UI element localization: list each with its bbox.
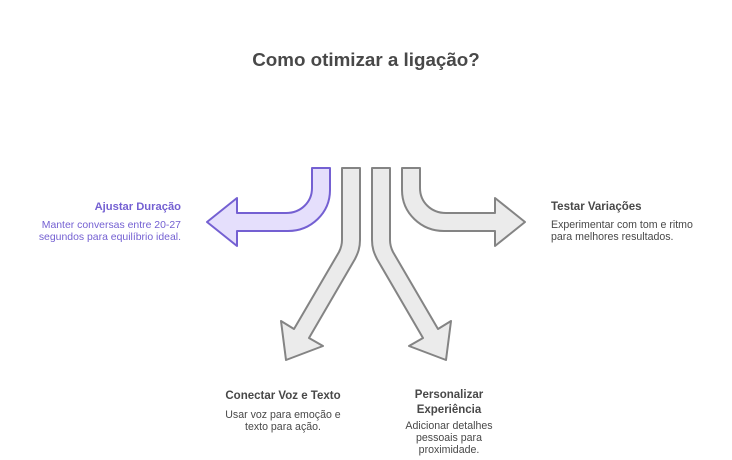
description: Personalizar Experiência: Adicionar detalhes: [405, 420, 493, 432]
heading: Conectar Voz e Texto: Conectar Voz e Texto: [225, 390, 341, 402]
text block: Testar Variações: [551, 201, 693, 243]
description: Ajustar Duração: Manter conversas entre 20-27: [42, 220, 181, 231]
arrow: Ajustar Duração: [207, 168, 330, 246]
description: Conectar Voz e Texto: [225, 409, 341, 432]
arrow: Testar Variações: [402, 168, 525, 246]
description: Conectar Voz e Texto: texto para ação.: [245, 420, 321, 432]
description: Testar Variações: [551, 219, 693, 243]
heading: Personalizar Experiência: Personalizar: [415, 389, 483, 401]
description: Conectar Voz e Texto: Usar voz para emoção e: [225, 409, 341, 421]
heading: Personalizar Experiência: Experiência: [417, 404, 481, 416]
text block: Personalizar Experiência: [405, 389, 493, 456]
description: Ajustar Duração: segundos para equilíbrio ideal.: [39, 232, 181, 243]
description: Personalizar Experiência: pessoais para: [416, 432, 482, 444]
description: Testar Variações: Experimentar com tom e ritmo: [551, 219, 693, 231]
description: Personalizar Experiência: proximidade.: [419, 444, 479, 456]
text block: Ajustar Duração: [39, 201, 181, 243]
arrow: Conectar Voz e Texto: [281, 168, 360, 360]
heading: Testar Variações: Testar Variações: [551, 201, 642, 213]
text block: Conectar Voz e Texto: [225, 390, 341, 432]
description: Testar Variações: para melhores resultados.: [551, 231, 673, 243]
title: Como otimizar a ligação?: [252, 49, 480, 70]
arrow: Personalizar Experiência: [372, 168, 451, 360]
heading: Personalizar Experiência: [415, 389, 484, 416]
description: Ajustar Duração: [39, 220, 181, 243]
description: Personalizar Experiência: [405, 420, 493, 456]
heading: Ajustar Duração: Ajustar Duração: [95, 201, 181, 213]
